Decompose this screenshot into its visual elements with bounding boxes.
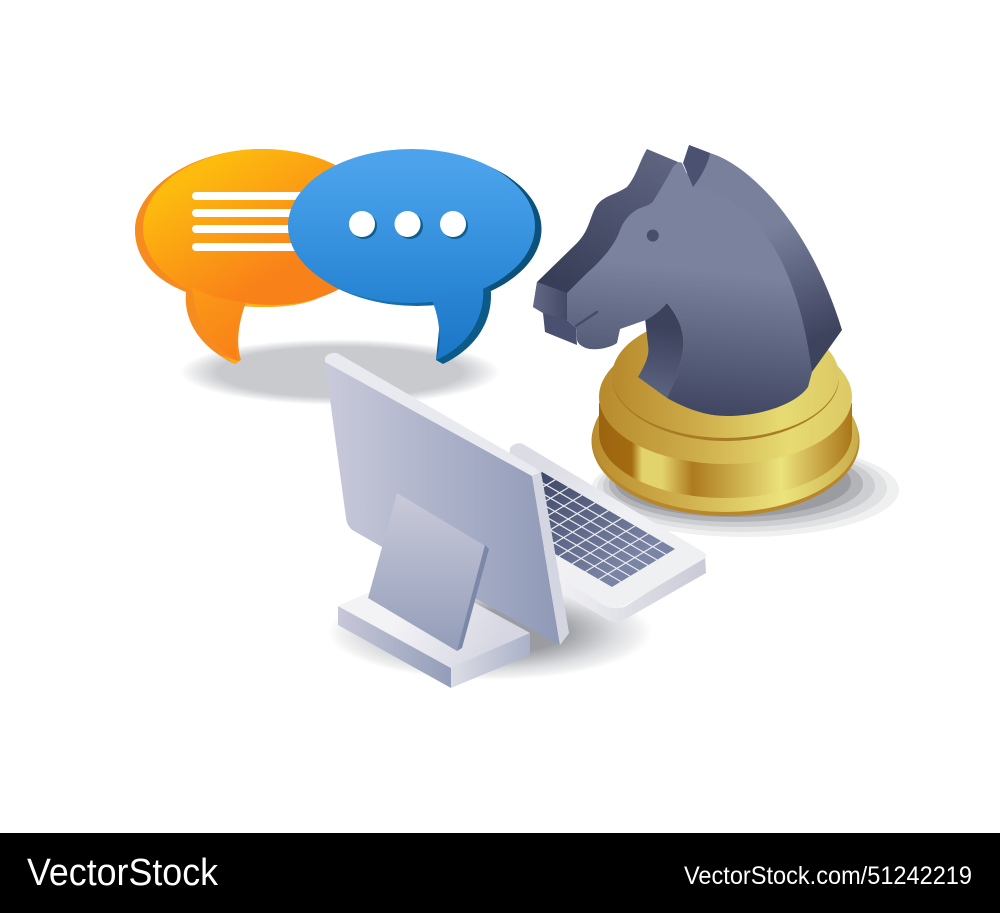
knight ear xyxy=(683,145,710,187)
watermark bar xyxy=(0,833,1000,913)
keyboard top xyxy=(500,443,706,608)
keys xyxy=(479,472,675,587)
typing dots xyxy=(349,211,468,239)
knight mane xyxy=(537,149,690,300)
knight rear face xyxy=(685,145,842,372)
watermark id text: VectorStock.com/51242219 xyxy=(684,862,972,890)
computer monitor xyxy=(325,353,569,688)
text lines xyxy=(192,192,312,251)
speech bubble: orange xyxy=(135,149,383,364)
monitor stand xyxy=(368,493,489,651)
shadow: computer xyxy=(328,584,652,680)
gold base xyxy=(592,314,860,516)
watermark logo text: VectorStock xyxy=(27,852,219,894)
knight neck front xyxy=(638,303,683,398)
keyboard side xyxy=(560,556,706,622)
keyboard xyxy=(479,443,706,622)
desktop base xyxy=(338,571,530,688)
chess knight xyxy=(533,145,860,516)
knight face xyxy=(567,162,812,416)
monitor back xyxy=(325,362,560,645)
speech bubble: blue xyxy=(288,149,542,364)
monitor edge xyxy=(325,353,569,645)
shadow: chess knight xyxy=(591,443,899,537)
knight eye xyxy=(647,230,659,242)
shadow: speech bubbles xyxy=(180,339,500,405)
knight mouth xyxy=(576,312,597,326)
knight snout xyxy=(533,282,577,345)
